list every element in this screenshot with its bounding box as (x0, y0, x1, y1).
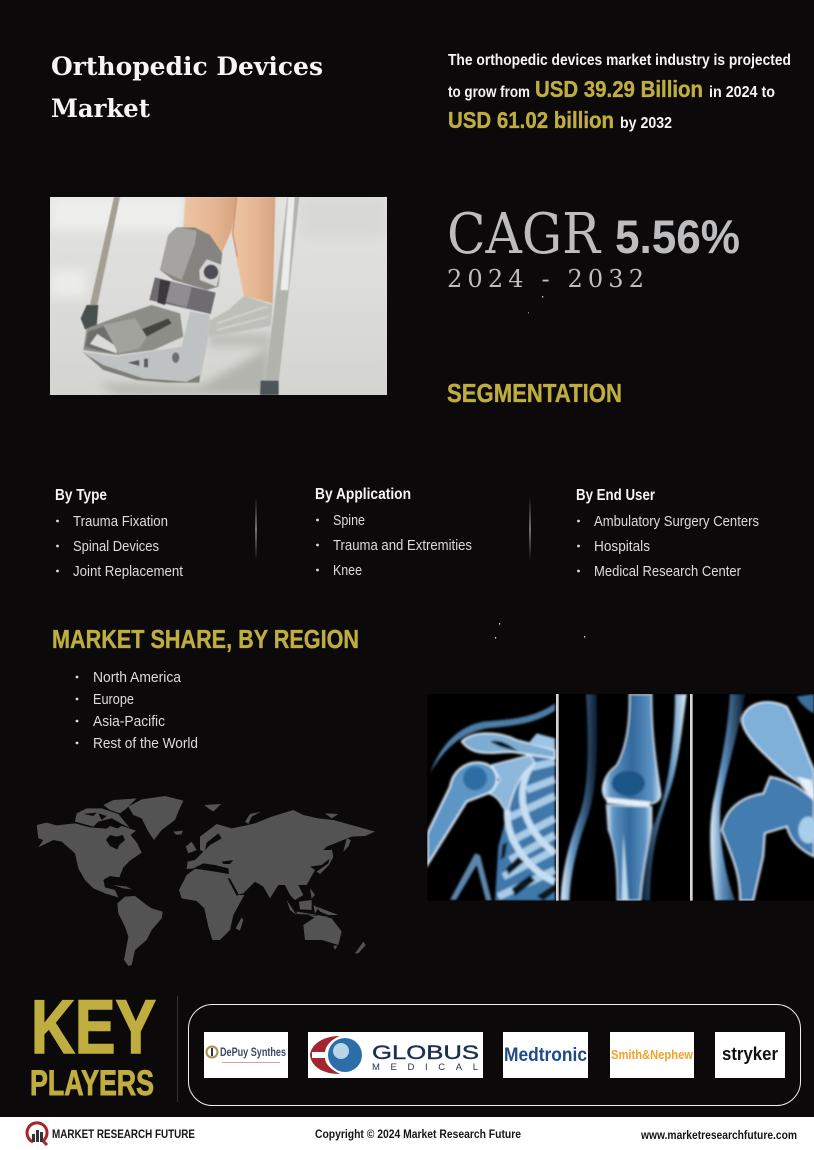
market forecast statement: by 2032 (620, 115, 672, 132)
shoulder skin line (430, 703, 555, 773)
footer: Copyright © 2024 Market Research Future (315, 1127, 521, 1141)
market forecast statement: in 2024 to (709, 84, 775, 101)
world map (37, 796, 375, 966)
sole details (127, 360, 139, 366)
panel: by end user: Ambulatory Surgery Centers (594, 514, 759, 530)
arm inner line (450, 853, 492, 901)
photo: orthopedic walking boot (50, 197, 387, 395)
list: regions: Asia-Pacific (93, 714, 165, 730)
ankle hinge (199, 259, 222, 287)
panel: key player logos (188, 1004, 800, 1106)
right panel skin (710, 694, 745, 901)
panel dividers (556, 694, 559, 901)
panel: by end user: By End User (576, 487, 655, 504)
list: regions: Rest of the World (93, 736, 198, 752)
logo: DePuy Synthes (204, 1032, 288, 1078)
inner seas (193, 833, 239, 896)
icon: market research future logo (27, 1123, 47, 1145)
logo: Medtronic: Medtronic (504, 1045, 587, 1066)
footer (0, 1117, 814, 1150)
panel: by end user (576, 487, 759, 580)
CAGR value: CAGR (447, 202, 602, 267)
specks (495, 296, 585, 639)
CAGR value: 5.56% (615, 210, 740, 263)
panel: by type: Joint Replacement (73, 564, 183, 580)
ribcage (495, 755, 555, 901)
heading: key players (30, 985, 156, 1103)
clavicle (462, 733, 555, 758)
crutch left (90, 197, 120, 305)
panel: by end user: Hospitals (594, 539, 650, 555)
list: regions (76, 670, 198, 752)
logo: Globus Medical: GLOBUS (372, 1043, 479, 1064)
CAGR value: 2024 - 2032 (447, 265, 644, 293)
logo: Globus Medical (308, 1032, 483, 1078)
panel: by end user: Medical Research Center (594, 564, 741, 580)
logo: DePuy Synthes: DePuy Synthes (220, 1047, 286, 1059)
market forecast statement: USD 61.02 billion (448, 107, 614, 133)
market forecast statement: USD 39.29 Billion (535, 76, 703, 102)
logo: Smith+Nephew (610, 1032, 694, 1078)
heading: market share by region: MARKET SHARE, BY REGION (52, 626, 359, 654)
logo: Stryker: stryker (722, 1044, 778, 1064)
eurasia, africa and oceania (179, 804, 375, 953)
title (51, 52, 323, 124)
logo: Globus Medical: MEDICAL (372, 1062, 478, 1073)
panel: by type: Trauma Fixation (73, 514, 168, 530)
boot padding (160, 227, 222, 290)
humerus (427, 762, 497, 865)
market forecast statement (448, 52, 791, 133)
legs (183, 197, 237, 253)
title: Market (51, 94, 150, 124)
panel: by type (55, 487, 183, 580)
panel: by application: By Application (315, 486, 411, 503)
tibia (607, 805, 652, 901)
panel: by application: Spine (333, 513, 365, 529)
market forecast statement: to grow from (448, 84, 530, 101)
femur (603, 694, 661, 804)
sock (208, 296, 273, 337)
americas and greenland (37, 796, 183, 966)
footer: MARKET RESEARCH FUTURE (52, 1127, 195, 1141)
panel: by type: Spinal Devices (73, 539, 159, 555)
crutch right (265, 197, 299, 382)
hudson bay (106, 835, 125, 849)
panel: by type: By Type (55, 487, 107, 504)
logo: Stryker (715, 1032, 785, 1078)
panel: by application (315, 486, 472, 579)
heading: key players: PLAYERS (30, 1064, 154, 1103)
list: regions: Europe (93, 692, 134, 708)
heading: segmentation: SEGMENTATION (447, 380, 622, 408)
heading: key players: KEY (31, 985, 156, 1070)
logo: Medtronic (503, 1032, 588, 1078)
boot shell (82, 312, 210, 383)
middle panel: skin lines (561, 694, 597, 901)
list: regions: North America (93, 670, 182, 686)
CAGR value (447, 202, 740, 293)
panel: by application: Knee (333, 563, 362, 579)
logo: Smith+Nephew: Smith&Nephew (611, 1047, 694, 1062)
panel: by application: Trauma and Extremities (333, 538, 472, 554)
strap (149, 277, 216, 314)
pelvis (742, 702, 814, 800)
x-ray image (427, 694, 814, 901)
scapula (488, 755, 535, 813)
title: Orthopedic Devices (51, 52, 323, 82)
